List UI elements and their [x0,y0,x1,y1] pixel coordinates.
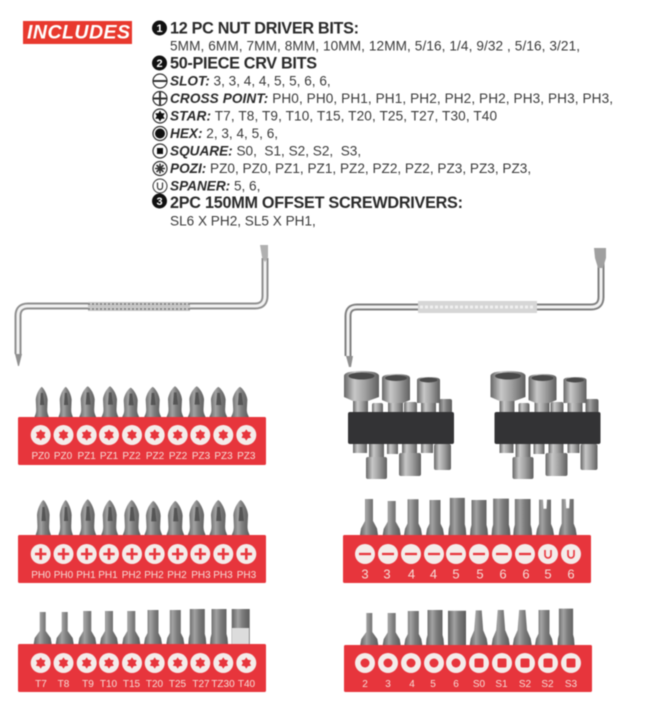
heading: crv bits: 50-PIECE CRV BITS [170,54,317,72]
size markers [31,653,256,673]
size labels: PZ0 [32,451,50,462]
size labels: T7 [35,679,47,690]
size labels: 4 [409,679,415,690]
size labels: PZ1 [78,451,96,462]
size labels: 4 [408,566,415,582]
size labels: PH0 [54,570,74,581]
offset screwdriver right [346,248,606,367]
bit set: pozi [18,386,266,465]
red holder [18,417,266,465]
size labels: 4 [430,566,437,582]
size markers [355,544,581,564]
text: hex sizes: HEX: 2, 3, 4, 5, 6, [170,126,278,141]
icon: slot [153,74,167,88]
size labels: PH1 [98,570,118,581]
bits [360,498,577,535]
size labels: PH2 [167,570,187,581]
text: spanner sizes: SPANER: 5, 6, [170,178,260,194]
icon: spanner [153,179,167,193]
size labels: PZ0 [54,451,73,462]
size labels: 3 [383,566,391,582]
size labels: PZ1 [100,451,119,462]
size labels: 5 [430,679,436,690]
size labels: 5 [476,566,484,582]
size labels: PH3 [213,570,233,581]
red holder [18,644,266,692]
size labels: 2 [362,679,368,690]
offset screwdriver left [15,245,268,366]
icon: hex [153,126,167,140]
size labels: 6 [567,566,575,582]
size labels: 5 [452,566,460,582]
bits [34,609,250,644]
icon: number 1 [152,20,167,36]
bit set: phillips [18,499,266,583]
size labels: T27 [192,679,210,690]
text: slot sizes: SLOT: 3, 3, 4, 4, 5, 5, 6, 6, [170,74,331,88]
size labels [32,451,256,462]
size labels: T20 [146,679,164,690]
size labels: T40 [238,679,256,690]
size markers [355,653,581,673]
size markers [31,425,256,445]
size labels: S2 [519,679,532,690]
red holder [343,535,591,583]
size labels: PZ3 [192,451,211,462]
red holder [344,645,592,692]
heading: nut driver bits: 12 PC NUT DRIVER BITS: [170,20,359,38]
size labels: PH3 [191,570,211,581]
size labels: PZ2 [122,451,141,462]
text: nut driver sizes: 5MM, 6MM, 7MM, 8MM, 10MM, 12MM, 5/16, 1/4, 9/32 , 5/16, 3/21, [170,38,580,54]
size labels: PH2 [122,570,142,581]
size labels: S3 [565,679,578,690]
nut driver set right [490,371,600,479]
size labels: PH3 [237,570,257,581]
size labels: PZ2 [146,451,165,462]
badge: includes: INCLUDES [27,22,130,44]
size labels: 3 [361,566,369,582]
size labels: 5 [544,566,552,582]
bit set: torx [18,609,266,692]
red holder [18,535,266,583]
size labels: PH0 [31,570,51,581]
text: cross point sizes: CROSS POINT: PH0, PH0, PH1, PH1, PH2, PH2, PH2, PH3, PH3, PH3, [170,91,613,106]
size labels: PH1 [76,570,96,581]
size labels: S2 [541,679,554,690]
icon: star [153,109,167,123]
size labels: 6 [453,679,459,690]
bits [34,386,249,417]
text: square sizes: SQUARE: S0, S1, S2, S2, S3, [170,144,361,158]
icon: pozi [153,162,167,176]
text: star sizes: STAR: T7, T8, T9, T10, T15, T20, T25, T27, T30, T40 [170,108,497,124]
size labels: T10 [100,679,118,690]
size labels [35,679,256,690]
icon: number 3: 3 [156,196,163,208]
bit set: hex and square [344,609,592,692]
icon: square [153,144,167,158]
size markers [31,544,256,564]
size labels: PZ2 [169,451,188,462]
icon: number 1: 1 [156,23,163,35]
size labels: T25 [169,679,187,690]
heading: offset screwdrivers: 2PC 150MM OFFSET SCREWDRIVERS: [170,194,463,212]
bit set: slot and spanner [343,498,591,583]
size labels: 6 [499,566,507,582]
size labels [361,566,575,582]
size labels: 3 [385,679,391,690]
bits [36,499,250,535]
size labels [31,570,257,581]
size labels: PZ3 [237,451,256,462]
size labels: S0 [473,679,486,690]
size labels: S1 [495,679,508,690]
text: pozi sizes: POZI: PZ0, PZ0, PZ1, PZ1, PZ2, PZ2, PZ2, PZ3, PZ3, PZ3, [170,161,531,176]
size labels [362,679,578,690]
text: screwdriver sizes: SL6 X PH2, SL5 X PH1, [170,214,316,228]
icon: number 2: 2 [156,58,163,70]
size labels: 6 [522,566,530,582]
icon: number 3 [152,194,167,208]
size labels: TZ30 [211,679,235,690]
size labels: T9 [82,679,94,690]
size labels: PZ3 [214,451,233,462]
contents list [152,20,613,228]
icon: number 2 [152,56,167,70]
size labels: T8 [58,679,70,690]
nut driver set left [344,371,454,479]
size labels: T15 [123,679,141,690]
size labels: PH2 [144,570,164,581]
bits [360,609,575,645]
icon: cross point [153,92,167,106]
